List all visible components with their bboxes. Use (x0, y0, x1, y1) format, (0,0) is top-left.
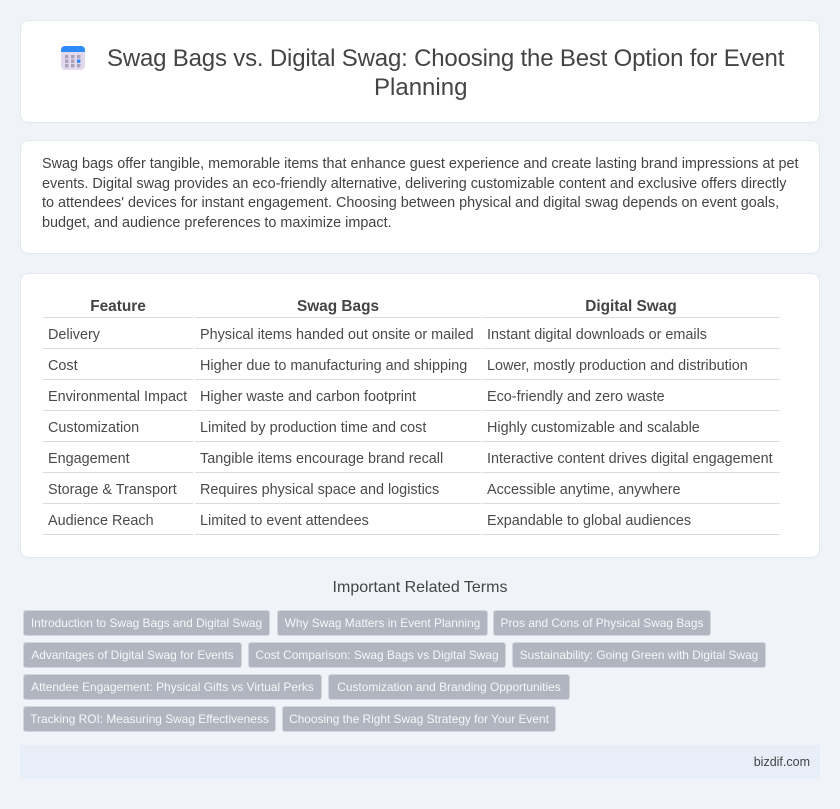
intro text (42, 156, 798, 230)
tag (282, 706, 556, 732)
table header: feature: Feature (90, 298, 146, 315)
tag (23, 674, 322, 700)
row: engagement: Engagement (48, 451, 130, 467)
row: cost: Higher due to manufacturing and shipping (200, 358, 467, 374)
intro text: events. Digital swag provides an eco-friendly alternative, delivering customizable content and exclusive offers directly (42, 176, 786, 192)
row: audience reach: Expandable to global audiences (487, 513, 691, 529)
row: storage and transport: Accessible anytime, anywhere (487, 482, 681, 498)
row: audience reach: Limited to event attendees (200, 513, 369, 529)
tag: Advantages of Digital Swag for Events (31, 648, 234, 662)
related terms heading: Important Related Terms (333, 579, 507, 596)
tag: Cost Comparison: Swag Bags vs Digital Swag (255, 648, 499, 662)
row: environmental impact: Environmental Impact (48, 389, 187, 405)
title: Swag Bags vs. Digital Swag: Choosing the Best Option for Event (107, 45, 784, 72)
footer: bizdif.com (754, 755, 810, 769)
tag (277, 610, 488, 636)
row: audience reach (48, 513, 691, 529)
title: Planning (374, 74, 467, 101)
footer (20, 745, 820, 779)
row: delivery: Physical items handed out onsite or mailed (200, 327, 474, 343)
tag (248, 642, 506, 668)
table header: swag bags: Swag Bags (297, 298, 379, 315)
row: storage and transport: Storage & Transport (48, 482, 177, 498)
row: delivery (48, 327, 707, 343)
tag (493, 610, 711, 636)
tag (23, 706, 276, 732)
row: customization: Highly customizable and scalable (487, 420, 700, 436)
row: environmental impact: Higher waste and carbon footprint (200, 389, 416, 405)
intro text: to attendees' devices for instant engagement. Choosing between physical and digital swag depends on event goals, (42, 195, 779, 211)
row: engagement: Interactive content drives digital engagement (487, 451, 773, 467)
row: cost: Cost (48, 358, 78, 374)
tag (328, 674, 570, 700)
icon: calendar (61, 46, 85, 70)
row: delivery: Instant digital downloads or emails (487, 327, 707, 343)
row: environmental impact: Eco-friendly and zero waste (487, 389, 665, 405)
tag (23, 642, 242, 668)
intro text: budget, and audience preferences to maximize impact. (42, 214, 392, 230)
row: storage and transport (48, 482, 681, 498)
row: cost: Lower, mostly production and distribution (487, 358, 748, 374)
title card (20, 20, 820, 123)
intro text: Swag bags offer tangible, memorable items that enhance guest experience and create lasting brand impressions at pet (42, 156, 798, 172)
tag (23, 610, 270, 636)
row: engagement: Tangible items encourage brand recall (200, 451, 443, 467)
row: customization: Customization (48, 420, 139, 436)
row: audience reach: Audience Reach (48, 513, 154, 529)
comparison table panel (20, 273, 820, 558)
row: customization (48, 420, 700, 436)
row: cost (48, 358, 748, 374)
tag: Why Swag Matters in Event Planning (285, 616, 480, 630)
row: delivery: Delivery (48, 327, 100, 343)
tag: Customization and Branding Opportunities (337, 680, 561, 694)
tag: Choosing the Right Swag Strategy for Your Event (289, 712, 549, 726)
tag (512, 642, 766, 668)
row: customization: Limited by production time and cost (200, 420, 426, 436)
intro panel (20, 140, 820, 254)
row: environmental impact (48, 389, 665, 405)
tag: Attendee Engagement: Physical Gifts vs Virtual Perks (31, 680, 314, 694)
tag: Tracking ROI: Measuring Swag Effectiveness (30, 712, 269, 726)
tag: Sustainability: Going Green with Digital Swag (520, 648, 758, 662)
row: engagement (48, 451, 773, 467)
tag: Pros and Cons of Physical Swag Bags (501, 616, 703, 630)
row: storage and transport: Requires physical space and logistics (200, 482, 439, 498)
table header: digital swag: Digital Swag (585, 298, 677, 315)
title (107, 45, 784, 101)
tag: Introduction to Swag Bags and Digital Swag (31, 616, 262, 630)
